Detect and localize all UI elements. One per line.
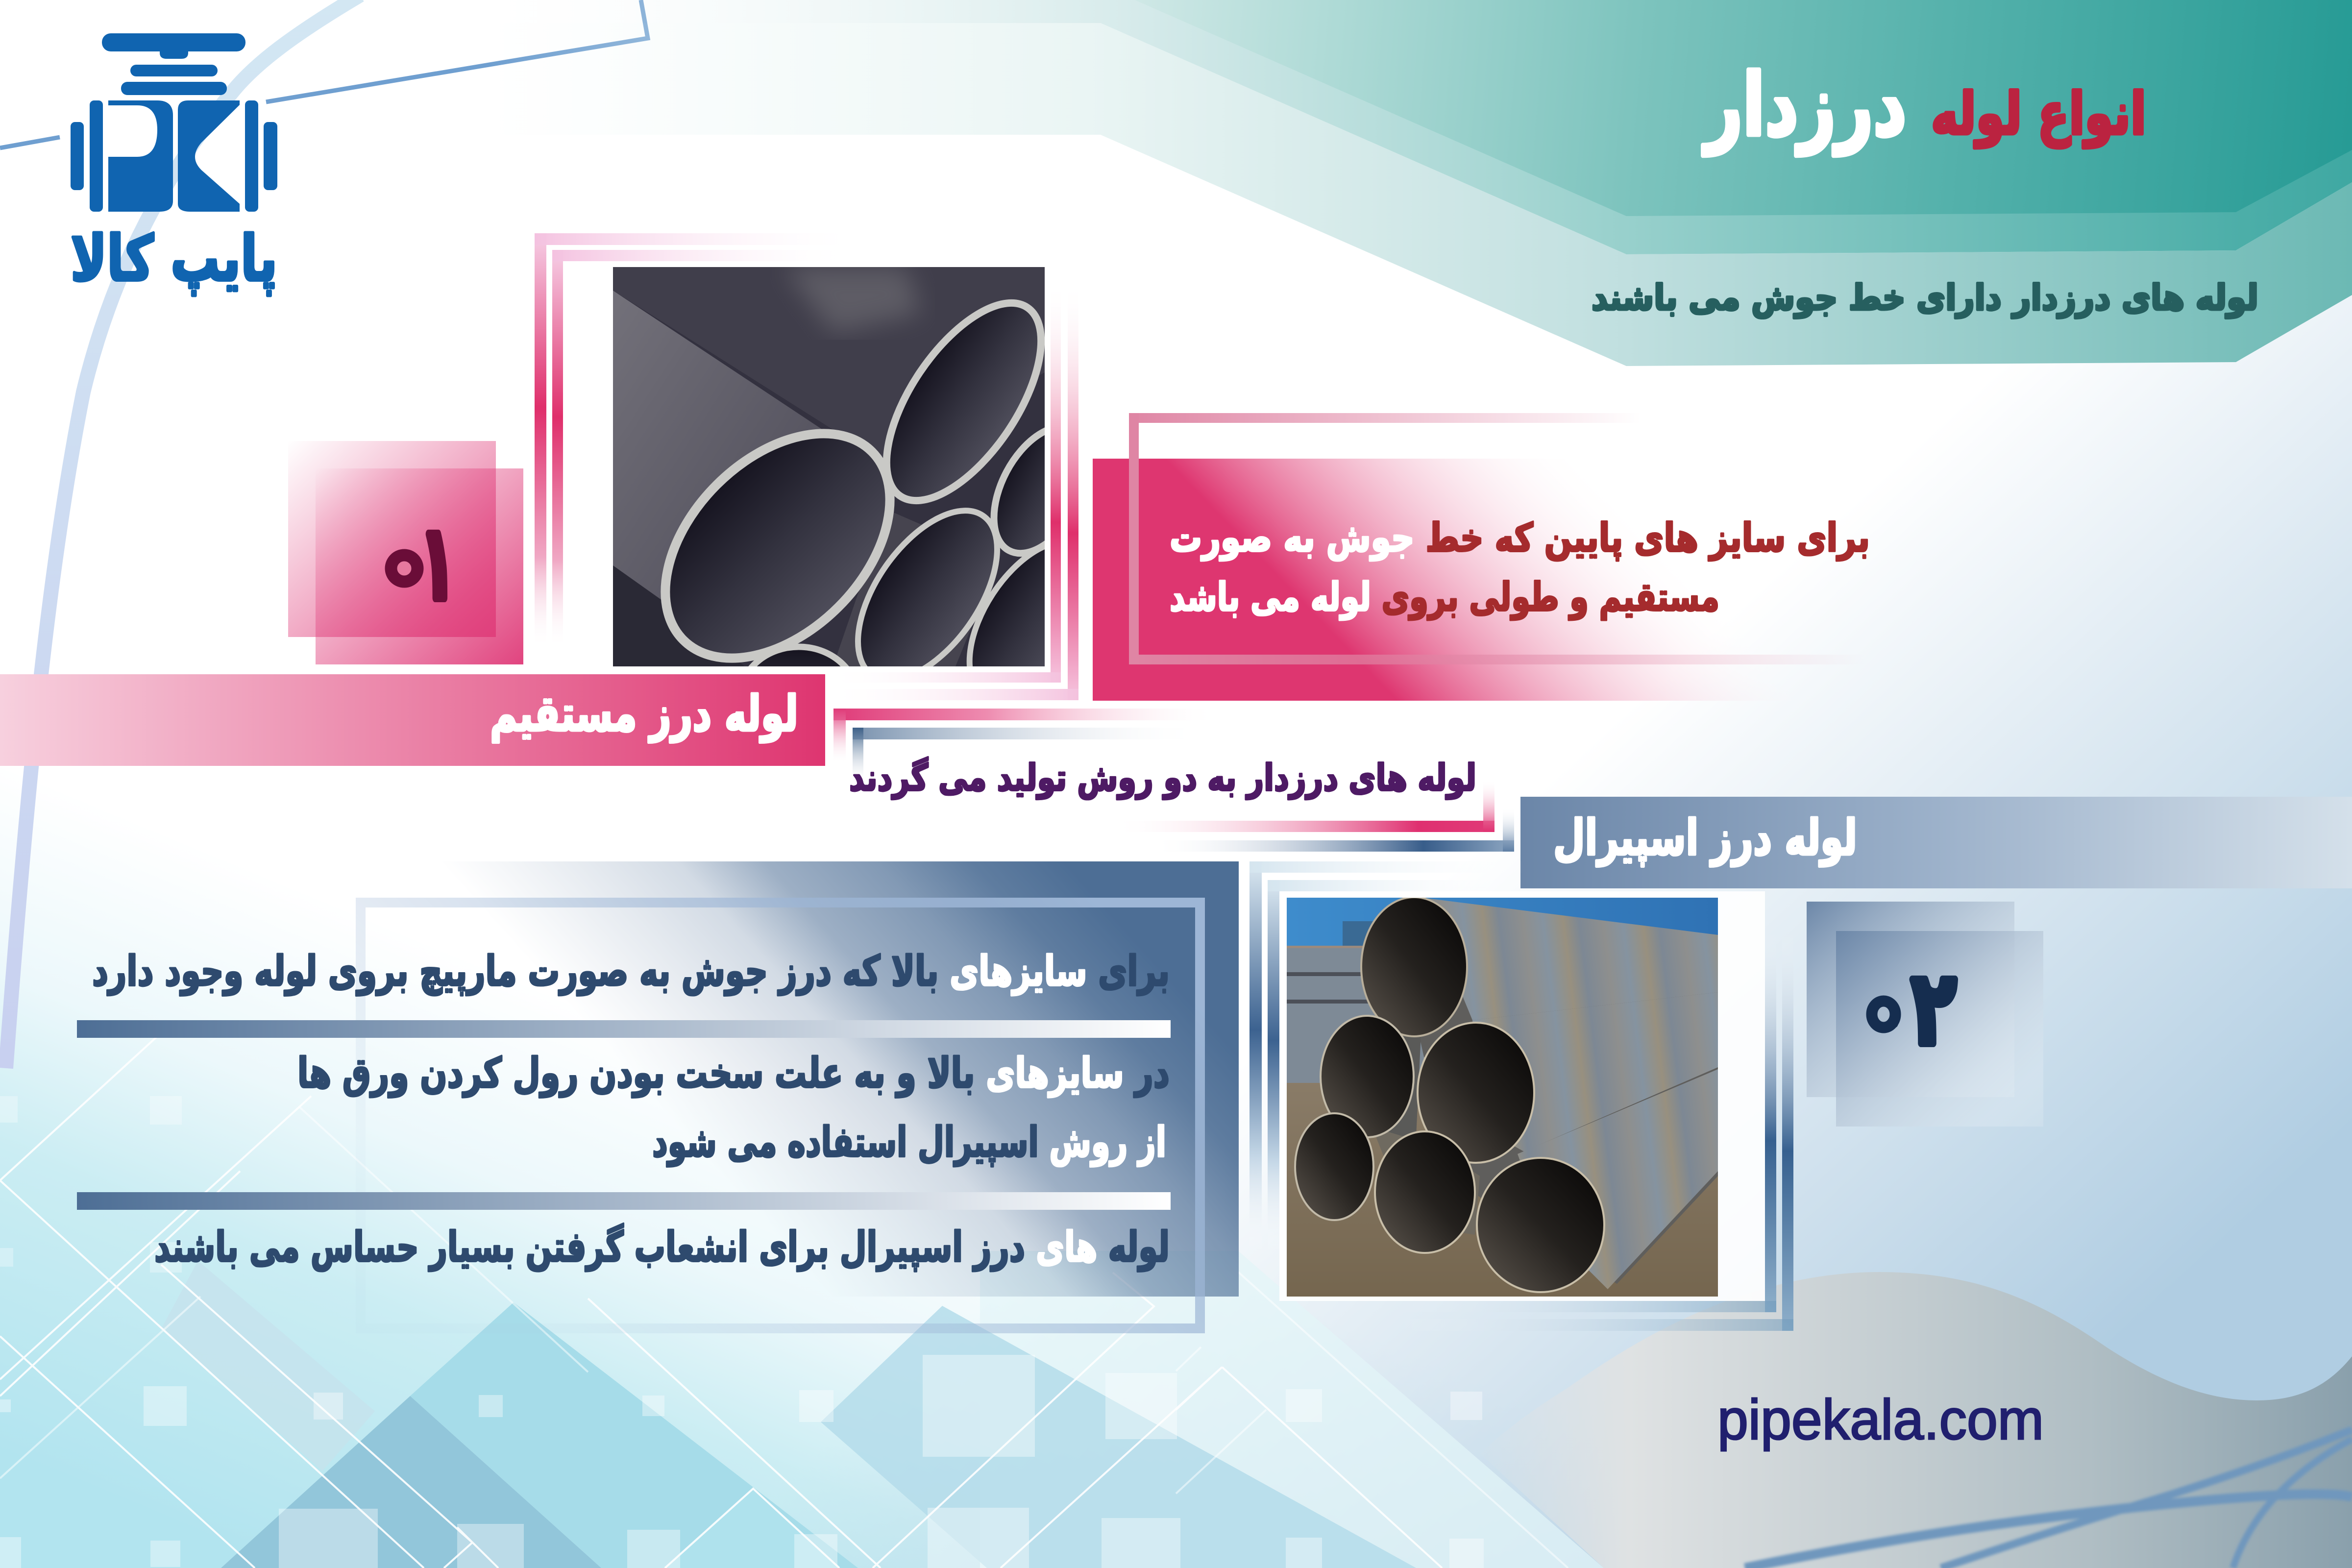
callout: two production methods — [833, 709, 1514, 852]
panel: spiral seam pipe — [77, 797, 2352, 1331]
title: درزدار — [1702, 56, 1907, 156]
callout frame blue top-left — [853, 728, 1201, 784]
text block: straight seam description — [1093, 413, 1926, 701]
subtitle: لوله های درزدار دارای خط جوش می باشند — [1592, 277, 2258, 318]
divider bar 1 — [77, 1020, 1171, 1038]
photo frame right — [825, 282, 1078, 700]
panel: straight seam pipe — [0, 233, 1926, 766]
background blue curves — [1745, 1430, 2352, 1568]
website url: pipekala.com — [1717, 1388, 2044, 1451]
photo: straight seam pipes — [613, 267, 1119, 750]
photo frame left — [1250, 861, 1524, 1253]
text block: straight seam description: مستقیم و طولی بروی لوله می باشد — [1170, 574, 1719, 620]
logo: wordmark: پایپ کالا — [71, 222, 277, 296]
number badge 01 — [288, 441, 523, 664]
heading bar: straight seam: لوله درز مستقیم — [490, 685, 798, 743]
header shape: lower teal layer — [490, 23, 2352, 366]
heading bar: straight seam — [0, 674, 825, 766]
callout frame pink top-left — [833, 709, 1219, 763]
logo: valve icon — [71, 33, 277, 212]
title: انواع لوله — [1931, 80, 2146, 148]
heading bar: spiral seam — [1520, 797, 2352, 888]
number badge 02 — [1807, 902, 2043, 1127]
text block: straight seam description: برای سایز های پایین که خط جوش به صورت — [1170, 515, 1870, 561]
photo frame right — [1394, 931, 1793, 1331]
text panel: spiral seam description — [77, 861, 1239, 1328]
background gray wave — [1480, 1272, 2352, 1568]
callout frame bottom-right — [1112, 780, 1514, 852]
number badge 01: ۰۱ — [385, 505, 455, 622]
divider bar 2 — [77, 1192, 1171, 1210]
number badge 02: ۰۲ — [1866, 951, 1956, 1067]
photo: spiral pipes — [1287, 897, 1718, 1297]
callout text: لوله های درزدار به دو روش تولید می گردند — [849, 756, 1476, 800]
photo backing — [1279, 891, 1765, 1301]
description line 4: لوله های درز اسپیرال برای انشعاب گرفتن بسیار حساس می باشند — [154, 1223, 1170, 1272]
panel background — [390, 861, 1239, 1297]
title — [1702, 56, 2146, 156]
description line 3: از روش اسپیرال استفاده می شود — [652, 1118, 1166, 1167]
description line 2: در سایزهای بالا و به علت سخت بودن رول کردن ورق ها — [297, 1049, 1170, 1098]
background triangle pattern — [0, 1036, 1604, 1568]
background light blue arc — [6, 0, 360, 1068]
logo — [71, 33, 277, 296]
photo frame left — [535, 233, 863, 648]
heading bar: spiral seam: لوله درز اسپیرال — [1553, 809, 1857, 867]
panel frame — [361, 903, 1200, 1328]
header shape: top teal layer — [1135, 0, 2352, 216]
description line 1: برای سایزهای بالا که درز جوش به صورت مارپیچ بروی لوله وجود دارد — [92, 947, 1170, 996]
background thin blue line — [0, 0, 648, 148]
header shape: middle teal layer — [490, 0, 2352, 254]
